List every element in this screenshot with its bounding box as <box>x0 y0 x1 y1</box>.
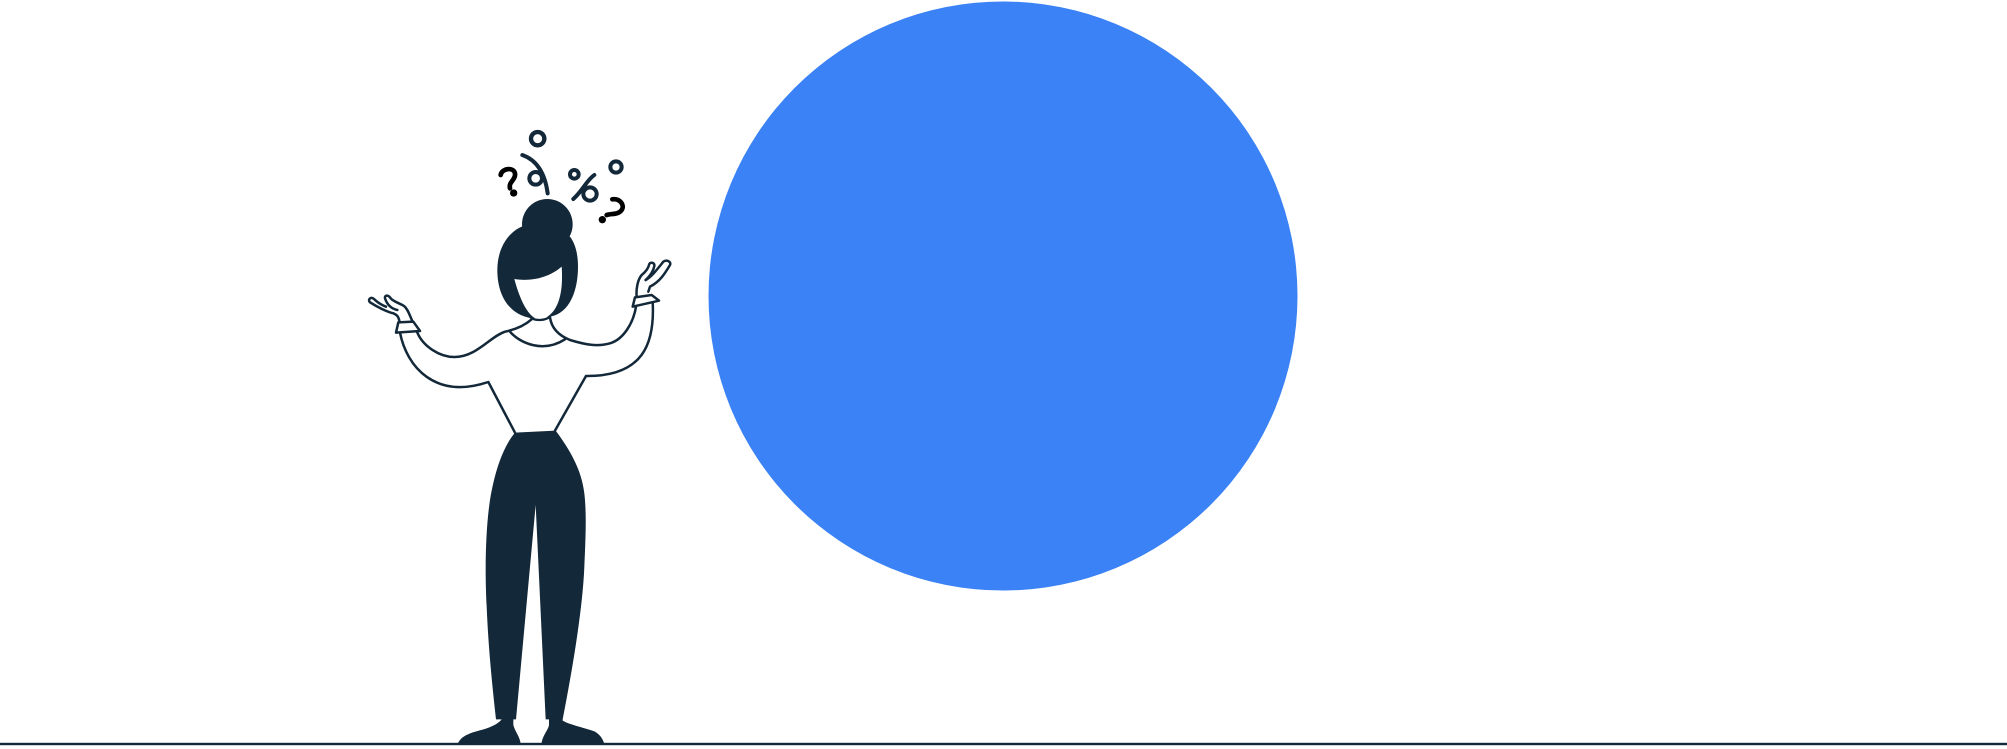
blue circle <box>708 2 1298 590</box>
right hand and cuff <box>633 261 670 307</box>
hair and face <box>497 199 578 320</box>
trousers and shoes <box>458 431 604 744</box>
left hand and cuff <box>369 296 420 333</box>
confusion symbols <box>501 132 623 223</box>
torso and arms outline <box>400 302 653 433</box>
ground line <box>0 743 2007 745</box>
person illustration <box>369 132 670 744</box>
